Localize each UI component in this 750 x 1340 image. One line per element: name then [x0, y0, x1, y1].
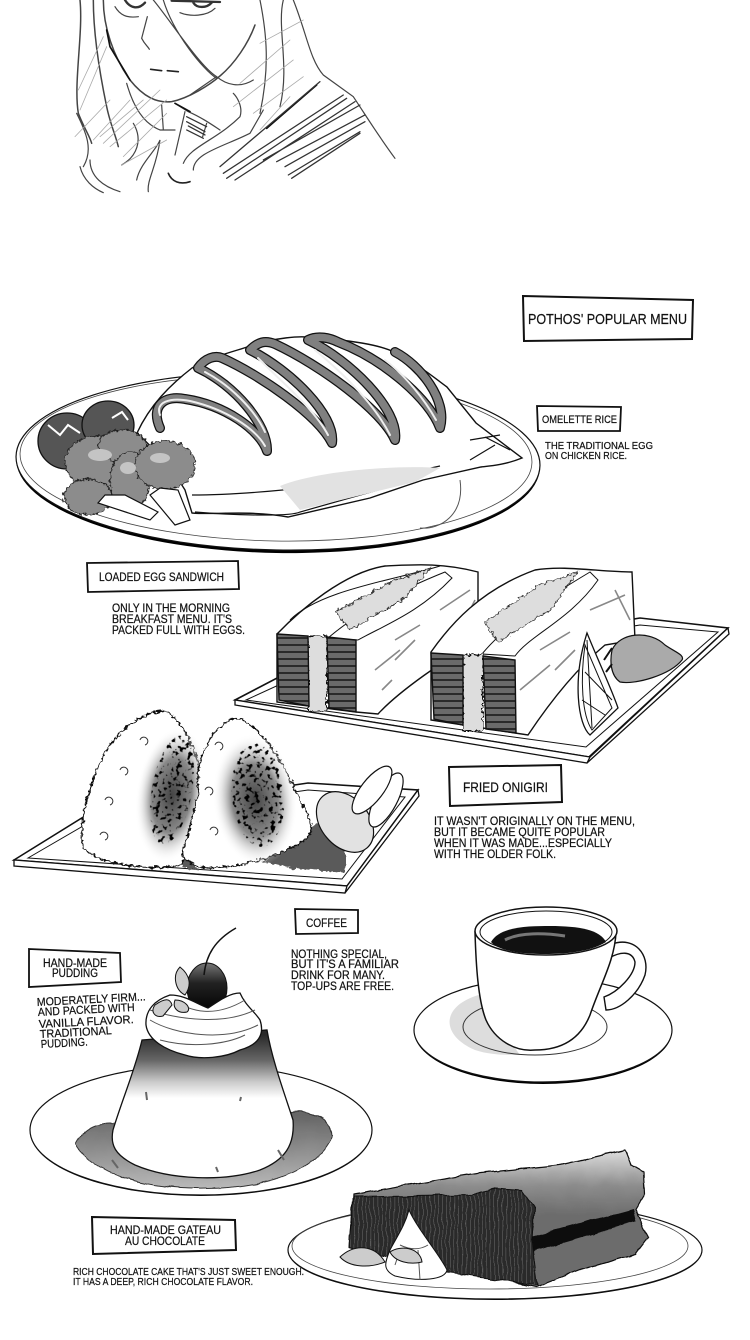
- ketchup stripes: [157, 337, 441, 451]
- label: omelette rice: OMELETTE RICE: [542, 414, 617, 426]
- text: onigiri description: IT WASN'T ORIGINALLY ON THE MENU,: [434, 816, 635, 828]
- omelette body: [137, 337, 522, 517]
- label: hand-made pudding: PUDDING: [52, 968, 98, 980]
- text: coffee description: BUT IT'S A FAMILIAR: [291, 959, 399, 971]
- text: pudding description: TRADITIONAL: [40, 1025, 113, 1041]
- tomatoes: [38, 413, 96, 469]
- label: hand-made pudding: HAND-MADE: [43, 958, 107, 970]
- text: pudding description: AND PACKED WITH: [38, 1002, 135, 1019]
- strawberry: [611, 635, 683, 683]
- text: onigiri description: [434, 816, 635, 861]
- rice balls: [82, 711, 203, 867]
- text: omelette rice description: ON CHICKEN RICE.: [545, 450, 627, 462]
- whipped cream: [146, 993, 262, 1058]
- cherry: [187, 963, 227, 1013]
- text: onigiri description: WHEN IT WAS MADE...ESPECIALLY: [434, 838, 612, 850]
- sandwich one: [277, 565, 478, 714]
- caramel sauce: [76, 1112, 332, 1189]
- text: coffee description: [291, 949, 399, 993]
- text: coffee description: TOP-UPS ARE FREE.: [291, 981, 394, 993]
- text: onigiri description: BUT IT BECAME QUITE POPULAR: [434, 827, 605, 839]
- label: fried onigiri: FRIED ONIGIRI: [463, 779, 548, 795]
- pickles: [305, 781, 385, 863]
- text: coffee description: DRINK FOR MANY.: [291, 970, 385, 982]
- tray: [14, 783, 418, 886]
- label: coffee: COFFEE: [306, 916, 347, 930]
- text: omelette rice description: [545, 440, 653, 462]
- label: hand-made gateau au chocolate: HAND-MADE GATEAU: [110, 1223, 221, 1237]
- text: sandwich description: PACKED FULL WITH EGGS.: [112, 625, 245, 637]
- text: gateau description: IT HAS A DEEP, RICH CHOCOLATE FLAVOR.: [73, 1276, 253, 1288]
- whipped cream: [386, 1210, 447, 1279]
- panel: pudding illustration: [30, 928, 372, 1196]
- text: pudding description: PUDDING.: [41, 1037, 88, 1051]
- broccoli: [64, 430, 195, 515]
- mint leaves: [340, 1248, 422, 1266]
- panel: fried onigiri illustration: [14, 711, 419, 893]
- heading: Pothos' Popular Menu: [523, 296, 693, 341]
- panel: chocolate cake illustration: [288, 1150, 702, 1300]
- label: loaded egg sandwich: [87, 561, 239, 592]
- text: pudding description: MODERATELY FIRM...: [37, 991, 146, 1009]
- panel: omelette rice illustration: [14, 337, 542, 558]
- label: hand-made gateau au chocolate: [92, 1217, 236, 1254]
- dark cut face: [349, 1188, 538, 1285]
- text: coffee description: NOTHING SPECIAL,: [291, 949, 387, 961]
- pudding body: [112, 1030, 293, 1178]
- filling band: [530, 1209, 636, 1252]
- label: coffee: [295, 909, 358, 934]
- label: fried onigiri: [449, 765, 562, 806]
- sketch: character portrait: [75, 0, 395, 193]
- text: omelette rice description: THE TRADITIONAL EGG: [545, 440, 653, 452]
- heading: Pothos' Popular Menu: POTHOS' POPULAR MENU: [528, 311, 687, 328]
- label: hand-made pudding: [29, 949, 121, 987]
- lemon wedge: [578, 633, 618, 735]
- sandwich two: [431, 568, 635, 735]
- leaf: [160, 822, 345, 873]
- panel: coffee cup illustration: [414, 907, 672, 1084]
- panel: egg sandwich illustration: [235, 565, 729, 763]
- text: pudding description: VANILLA FLAVOR.: [39, 1014, 134, 1031]
- cake side: [349, 1150, 649, 1287]
- text: sandwich description: [112, 603, 245, 637]
- text: pudding description: [37, 991, 146, 1051]
- tray: [235, 618, 728, 757]
- text: sandwich description: BREAKFAST MENU. IT'S: [112, 614, 232, 626]
- label: omelette rice: [537, 406, 621, 431]
- text: gateau description: [73, 1266, 304, 1288]
- text: sandwich description: ONLY IN THE MORNING: [112, 603, 230, 615]
- text: gateau description: RICH CHOCOLATE CAKE THAT'S JUST SWEET ENOUGH.: [73, 1266, 304, 1278]
- label: loaded egg sandwich: LOADED EGG SANDWICH: [99, 572, 224, 584]
- label: hand-made gateau au chocolate: AU CHOCOLATE: [125, 1234, 205, 1248]
- text: onigiri description: WITH THE OLDER FOLK.: [434, 849, 556, 861]
